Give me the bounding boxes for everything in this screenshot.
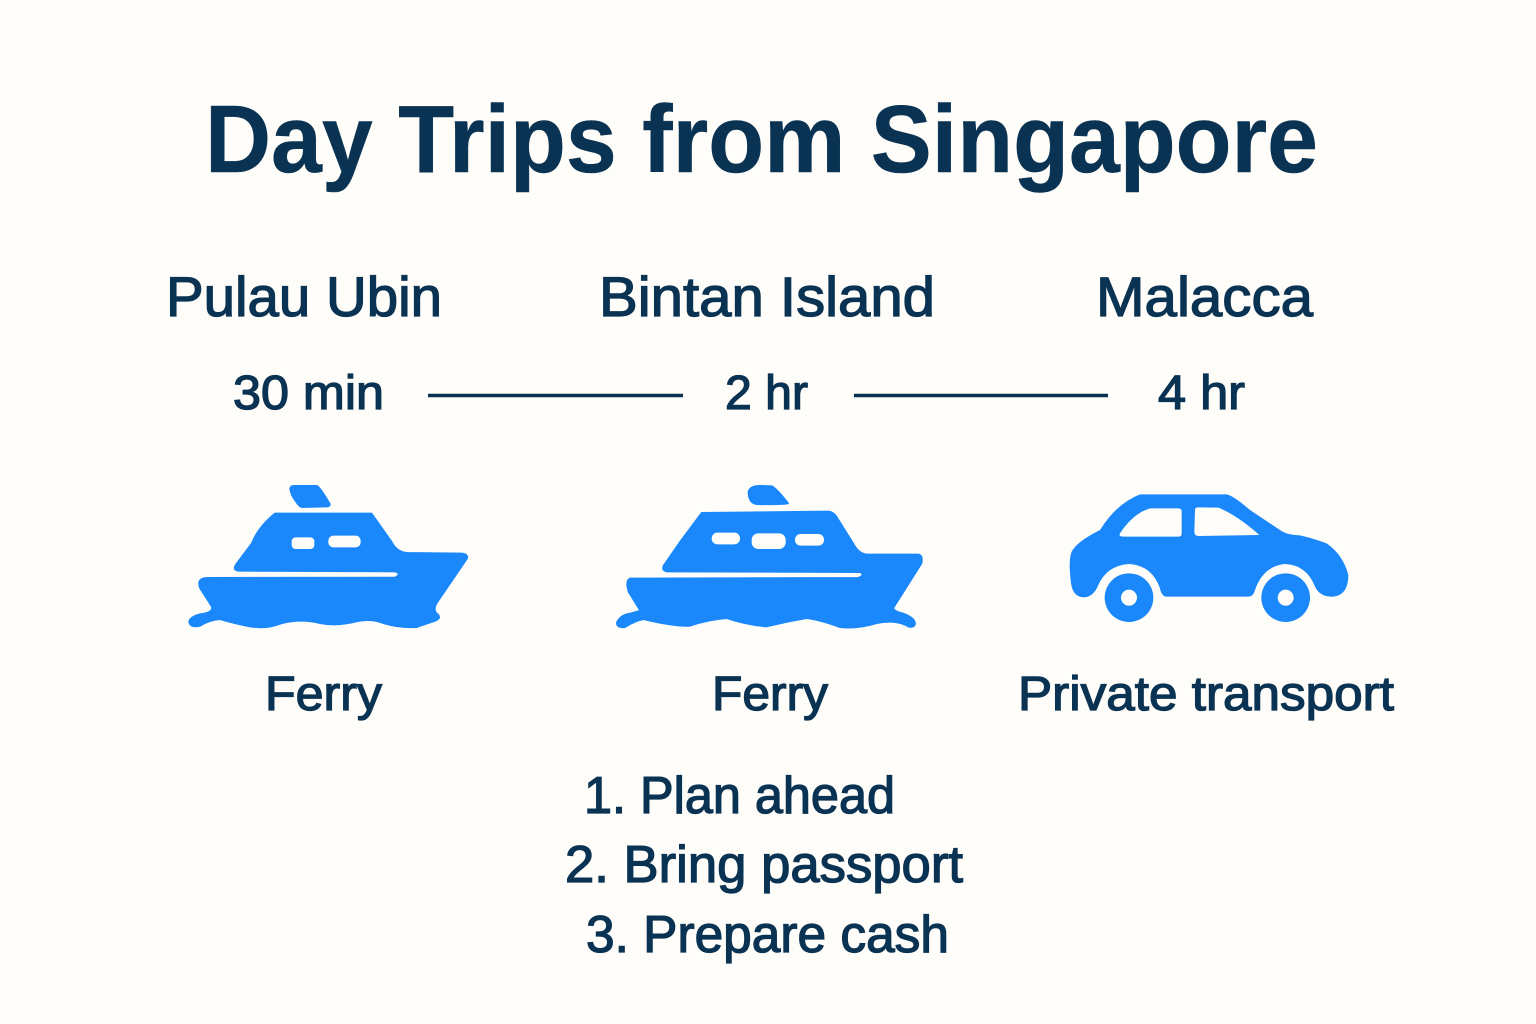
tip 3: 3. Prepare cash	[586, 906, 949, 964]
icon: car to Malacca	[1070, 494, 1348, 622]
connector line: Bintan Island to Malacca	[854, 394, 1108, 397]
label: Private transport: Private transport	[1018, 668, 1394, 721]
icon: ferry to Bintan Island	[617, 486, 922, 628]
heading: Pulau Ubin: Pulau Ubin	[166, 265, 442, 328]
label: Ferry (Bintan Island): Ferry	[712, 668, 828, 721]
title: Day Trips from Singapore	[205, 86, 1318, 193]
heading: Bintan Island: Bintan Island	[599, 265, 935, 328]
heading: Malacca: Malacca	[1096, 265, 1314, 328]
tips list	[565, 767, 964, 964]
label: Ferry (Pulau Ubin): Ferry	[265, 668, 382, 721]
tip 2: 2. Bring passport	[565, 836, 964, 894]
tip 1: 1. Plan ahead	[584, 767, 895, 825]
duration: 4 hr: 4 hr	[1158, 367, 1245, 420]
duration: 2 hr: 2 hr	[725, 367, 808, 420]
icon: ferry to Pulau Ubin	[189, 486, 467, 628]
duration: 30 min: 30 min	[233, 367, 384, 420]
connector line: Pulau Ubin to Bintan Island	[428, 394, 683, 397]
